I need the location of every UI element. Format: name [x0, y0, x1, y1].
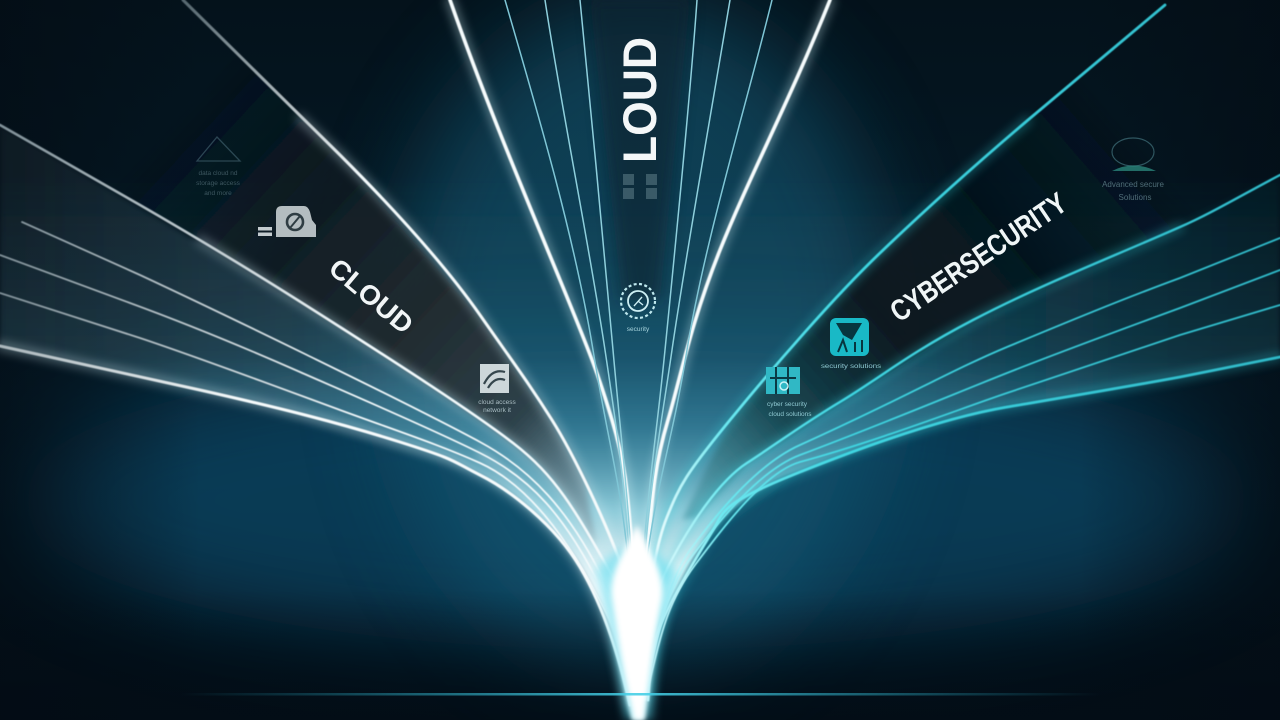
icon: cloud network with caption: network it [483, 407, 511, 414]
white streams: left fan [0, 0, 637, 705]
heading: CLOUD: CLOUD [323, 253, 419, 340]
icon: teal shield panel with caption [821, 318, 882, 370]
icon: faded triangle with caption [196, 137, 241, 197]
icon: cloud server [258, 206, 316, 237]
icon: faded triangle with caption: storage access [196, 180, 241, 187]
icon: teal shield panel with caption: security solutions [821, 363, 882, 370]
icon: cloud network with caption [478, 364, 517, 414]
icon: faded oval with caption: Solutions [1119, 193, 1151, 202]
icon: faded triangle with caption: and more [204, 190, 232, 197]
heading: CYBERSECURITY: CYBERSECURITY [884, 187, 1073, 329]
panel: center band [590, 0, 690, 300]
icon: faded blocks under LOUD [623, 174, 657, 199]
panel: cybersecurity band [682, 5, 1280, 520]
icon: faded triangle with caption: data cloud nd [198, 170, 238, 177]
icon: faded oval with caption: Advanced secure [1102, 180, 1164, 189]
icon: center badge with caption [621, 284, 655, 333]
right fan haze [680, 175, 1280, 560]
panel: cloud band [0, 0, 596, 545]
icon: cloud network with caption: cloud access [478, 399, 517, 406]
icon: teal network panel with caption: cloud solutions [768, 411, 812, 418]
icon: faded oval with caption [1102, 138, 1164, 202]
icon: center badge with caption: security [627, 326, 650, 333]
heading: LOUD: LOUD [613, 37, 666, 163]
icon: teal network panel with caption [766, 367, 812, 418]
icon: teal network panel with caption: cyber security [767, 401, 808, 408]
teal streams: right fan [640, 5, 1280, 700]
horizon line [180, 693, 1100, 696]
left fan haze [0, 125, 600, 560]
white and teal streams: center fan [450, 0, 830, 700]
central light core [596, 525, 678, 720]
